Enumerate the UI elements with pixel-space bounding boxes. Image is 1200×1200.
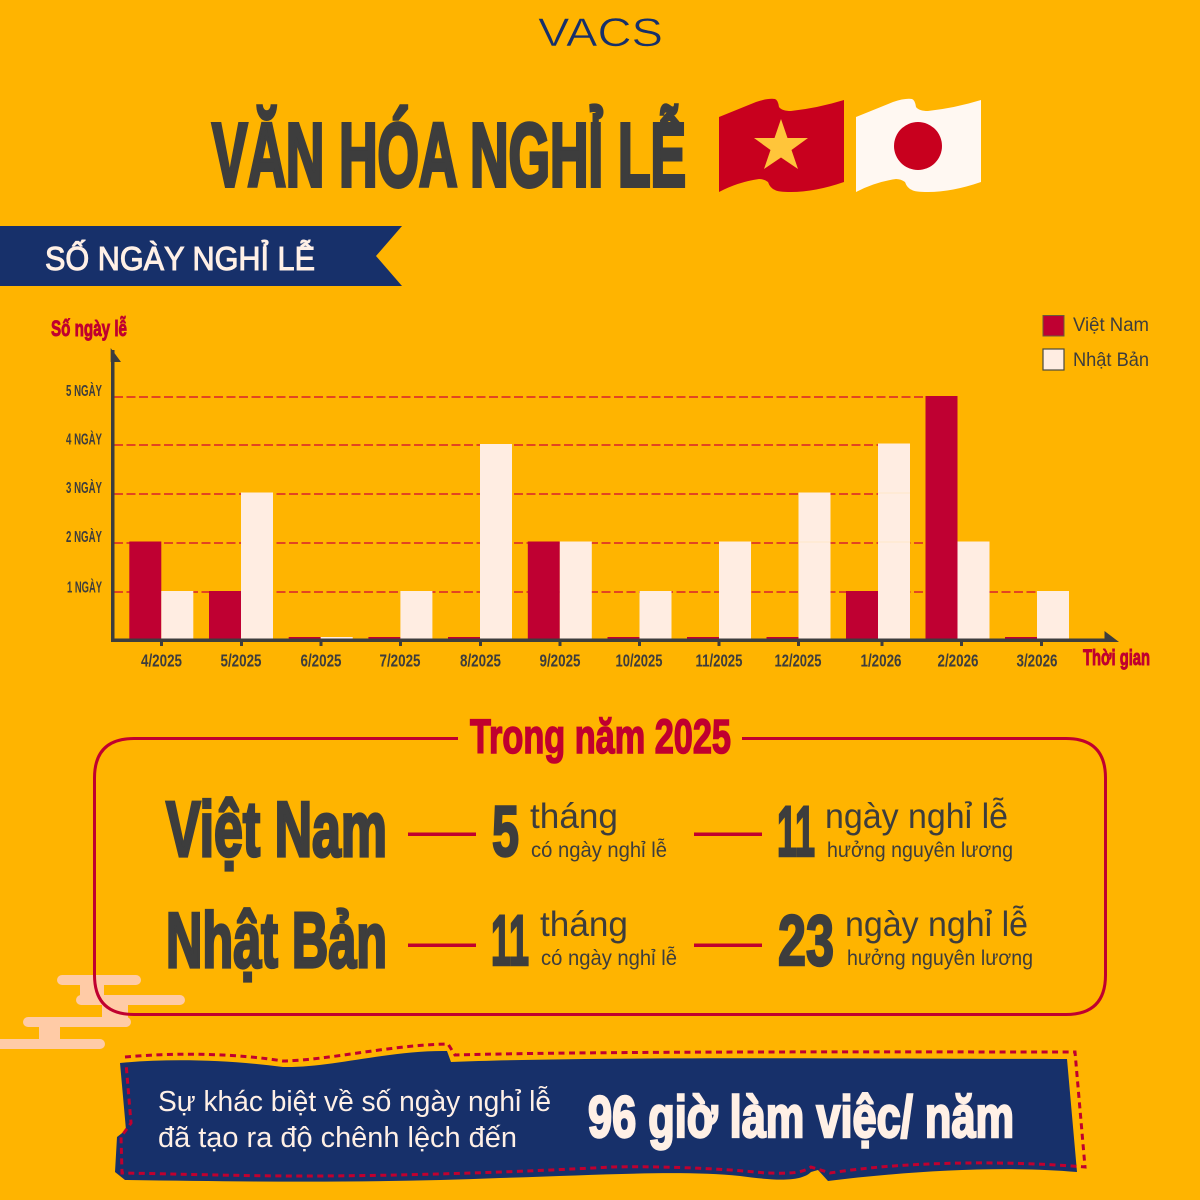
- icon: Japan flag: [856, 99, 981, 192]
- row: Việt Nam: Việt Nam: [166, 785, 387, 873]
- x axis labels: 5/2025: [220, 650, 262, 670]
- y axis labels: 5 NGÀY: [66, 381, 102, 400]
- icon: Vietnam flag: [719, 99, 844, 192]
- x axis labels: 9/2025: [540, 650, 581, 670]
- x axis labels: 8/2025: [460, 650, 501, 670]
- row: Việt Nam: 11: [777, 793, 815, 872]
- row: Việt Nam: ngày nghỉ lễ: [825, 797, 1008, 836]
- y axis title: Số ngày lễ: [51, 316, 127, 341]
- x axis labels: 11/2025: [696, 650, 743, 670]
- legend: Việt Nam: [1073, 314, 1149, 336]
- row: Nhật Bản: hưởng nguyên lương: [847, 947, 1033, 970]
- row: Nhật Bản: có ngày nghỉ lễ: [541, 947, 677, 970]
- x axis labels: 1/2026: [860, 650, 902, 670]
- section ribbon: số ngày nghỉ lễ: [0, 226, 402, 286]
- row: Việt Nam: 5: [492, 793, 519, 872]
- row: Nhật Bản: [166, 896, 1033, 984]
- y axis labels: 3 NGÀY: [66, 478, 102, 497]
- row: Nhật Bản: tháng: [540, 905, 628, 944]
- legend: [1043, 314, 1149, 371]
- x axis labels: 2/2026: [938, 650, 979, 670]
- row: Nhật Bản: 23: [778, 902, 834, 981]
- x axis labels: 10/2025: [616, 650, 663, 670]
- y axis labels: 4 NGÀY: [66, 430, 102, 448]
- title: VĂN HÓA NGHỈ LỄ: [212, 104, 686, 206]
- bars: Việt Nam: [129, 396, 1037, 640]
- section ribbon: số ngày nghỉ lễ: SỐ NGÀY NGHỈ LỄ: [45, 239, 315, 277]
- panel: comparison in 2025: [94, 711, 1106, 1014]
- legend: Nhật Bản: [1073, 349, 1149, 371]
- axes: [111, 348, 1119, 646]
- panel heading: Trong năm 2025: [470, 711, 731, 764]
- row: Việt Nam: có ngày nghỉ lễ: [531, 839, 667, 862]
- x axis labels: [141, 650, 1058, 670]
- x axis labels: 4/2025: [141, 650, 182, 670]
- row: Nhật Bản: Nhật Bản: [166, 896, 387, 984]
- logo: VACS: VACS: [538, 11, 663, 55]
- row: Việt Nam: hưởng nguyên lương: [827, 839, 1013, 862]
- bars: Nhật Bản: [161, 444, 1069, 640]
- decorative cloud: [0, 975, 185, 1049]
- row: Nhật Bản: ngày nghỉ lễ: [845, 905, 1028, 944]
- x axis labels: 12/2025: [774, 650, 822, 670]
- bar chart: [51, 314, 1150, 670]
- y axis labels: 2 NGÀY: [66, 527, 102, 546]
- callout banner: [115, 1044, 1085, 1182]
- x axis labels: 7/2025: [380, 650, 421, 670]
- x axis labels: 6/2025: [300, 650, 342, 670]
- callout text: Sự khác biệt về số ngày nghỉ lễ: [158, 1085, 551, 1118]
- callout banner: đã tạo ra độ chênh lệch đến: [158, 1122, 517, 1154]
- row: Việt Nam: tháng: [530, 797, 618, 836]
- x axis labels: 3/2026: [1016, 650, 1058, 670]
- row: Việt Nam: [166, 785, 1013, 873]
- y axis labels: [66, 381, 102, 596]
- y axis labels: 1 NGÀY: [67, 578, 102, 596]
- row: Nhật Bản: 11: [491, 902, 529, 981]
- x axis title: Thời gian: [1083, 645, 1150, 670]
- callout figure: 96 giờ làm việc/ năm: [588, 1085, 1014, 1150]
